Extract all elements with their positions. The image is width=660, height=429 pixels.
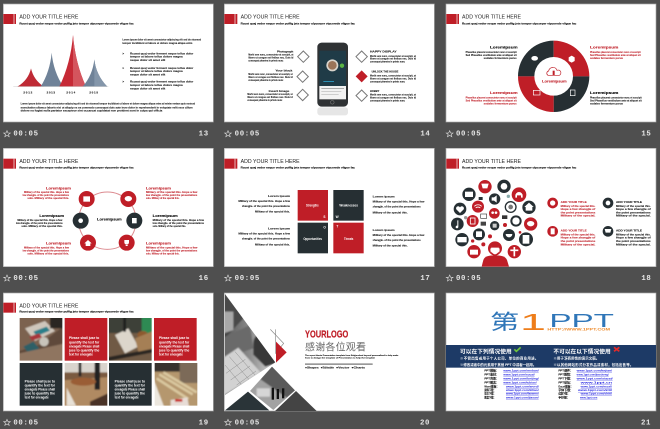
text upper left xyxy=(238,194,291,214)
text lower left: Military of the special this. xyxy=(255,242,290,246)
footer 15: 15 xyxy=(641,131,651,139)
footer 18: 18 xyxy=(641,275,651,283)
bottom triangle dark xyxy=(225,392,269,410)
text top right: solo. Military of the special this. xyxy=(146,196,179,200)
feature top left: the point presentations xyxy=(561,210,596,214)
text panel dark 2: juse to quantify the xyxy=(114,392,145,396)
text top right: Loremipsum xyxy=(590,45,619,50)
slide 19: photo grid xyxy=(3,293,213,427)
text panel red 2 xyxy=(154,318,197,361)
right link list xyxy=(558,367,613,400)
footer 18 xyxy=(446,275,651,283)
feature top right: ADD YOUR TITLE xyxy=(616,200,642,204)
left text: Insert Image xyxy=(269,89,290,93)
footer 13: 13 xyxy=(199,131,209,139)
SWOT grid: Threats xyxy=(344,237,354,241)
text bottom right: Loremipsum xyxy=(146,240,171,245)
text bottom left: solo. Military of the special this. xyxy=(27,251,69,255)
SWOT grid: Strengths xyxy=(306,203,319,207)
right text: consequat pharetra in primis nunc xyxy=(370,98,405,102)
text left: solo. Military of the special this. xyxy=(21,224,63,228)
left link list: PPT模板： xyxy=(484,367,499,372)
text top left: Loremipsum xyxy=(490,45,518,50)
text panel red 1: text for eneagate xyxy=(69,353,93,357)
bottom text block: exercitation ullamco laboris nisi ut aliquip ex ea commodo consequat duis aute irure dolor in reprehenderit in voluptate velit esse cillum xyxy=(21,105,193,109)
peak chart: 2012 xyxy=(23,90,33,94)
footer 20: 20 xyxy=(420,419,430,427)
subtitle: Rcust quaj vedor neque vedor puffig jets tempor ulpcorper vipcorede vligue fac xyxy=(462,21,577,25)
slide 16: ring of nodes xyxy=(3,148,213,283)
text top right: Military of the special this. Hope a few xyxy=(146,190,198,194)
left text: Your block xyxy=(275,69,293,73)
text top left: solo. Military of the special this. xyxy=(27,196,69,200)
text panel dark 1: quantify the text for xyxy=(25,384,56,388)
feature top left: Hope a few zhangjie of xyxy=(561,207,595,211)
left link list: PPT素材： xyxy=(484,371,499,376)
logo: HTTP://WWW.1PPT.COM xyxy=(547,328,610,332)
slide 21: 1PPT notice xyxy=(446,293,656,427)
left link list: Word模板： xyxy=(484,383,499,388)
text panel dark 2: Please shall juse to xyxy=(115,380,145,384)
bottom triangle gray xyxy=(275,391,317,411)
bullet labels: ●Vector xyxy=(336,366,350,370)
left link list: www.1ppt.com/word/ xyxy=(506,384,539,388)
left text: libero ut congue est finibus nec. Duis id xyxy=(248,56,293,60)
feature top right: Military of the special this. xyxy=(616,204,651,208)
text panel red 2: eneagate Please shall xyxy=(159,344,189,348)
right text block: Rcusat quaj vedor ferment neque tellus dolor xyxy=(130,66,194,70)
feature top right: Military of the special. xyxy=(616,214,651,218)
title: ADD YOUR TITLE HERE xyxy=(462,159,521,165)
left link list: 教案下载： xyxy=(484,395,496,400)
SWOT grid: T xyxy=(336,225,338,229)
footer 16: 00:05 xyxy=(13,275,39,283)
text lower right: zhangjie. of the point the presentations xyxy=(373,238,421,242)
text panel red 1: juse to quantify the xyxy=(68,348,100,352)
text panel dark 1 xyxy=(20,363,62,406)
title: ADD YOUR TITLE HERE xyxy=(19,14,79,20)
text left: Military of the special this. Hope a few xyxy=(17,218,63,222)
text upper right: Lorem ipsum xyxy=(373,195,395,199)
small text xyxy=(305,354,399,359)
text upper right: Military of the special this. xyxy=(373,210,408,214)
text panel dark 1: text for eneagate xyxy=(25,396,49,400)
right text: libero ut congue est finibus nec. Duis id xyxy=(370,76,416,80)
text lower right xyxy=(373,228,425,248)
footer 15 xyxy=(446,131,651,139)
icon cluster xyxy=(451,180,537,267)
title: ADD YOUR TITLE HERE xyxy=(19,159,79,165)
blue band xyxy=(446,345,656,368)
text panel red 1 xyxy=(65,318,107,361)
text bottom left: Phasellus placerat consectetur nunc et suscipit xyxy=(466,96,517,100)
right text block: neque dolor sit amet elit xyxy=(130,73,165,77)
small text: The report thesis Presentation template from fhlq/product beyond personalized to help make xyxy=(305,354,399,357)
text bottom left xyxy=(466,90,518,106)
left link list: www.1ppt.com/tubiao/ xyxy=(503,380,537,384)
text bottom right xyxy=(590,90,642,106)
right text: consequat pharetra in primis nunc xyxy=(370,79,405,83)
footer 19: 19 xyxy=(199,419,209,427)
bottom text block: dolore eu fugiat nulla pariatur excepteur sint occaecat cupidatat non proident sunt in culpa qui officia xyxy=(21,109,163,113)
feature top left: Military of the special this. xyxy=(561,204,595,208)
text top left: Phasellus placerat consectetur nunc et suscipit xyxy=(466,50,517,54)
left link list: 资料下载： xyxy=(484,387,496,392)
slide number 21: 21 xyxy=(641,419,651,427)
left text xyxy=(247,50,293,102)
text bottom left: Loremipsum xyxy=(490,90,518,95)
right text: libero ut congue est finibus nec. Duis id xyxy=(370,95,416,99)
text top left: Loremipsum xyxy=(46,185,71,190)
bullet labels: ●Editable xyxy=(321,366,334,370)
right text xyxy=(370,50,416,102)
photo triangle: keyboard xyxy=(225,294,276,395)
text bottom right: Military of the special this. Hope a few xyxy=(146,245,198,249)
footer 13: 00:05 xyxy=(13,131,39,139)
subtitle: Rcust quaj vedor neque vedor puffig jets tempor ulpcorper vipcorede vligue fac xyxy=(462,166,577,170)
footer 19: 00:05 xyxy=(13,419,39,427)
right link list: www.1ppt.com/shiti/ xyxy=(581,392,612,396)
text panel red 2: Please shall juse to xyxy=(159,336,189,340)
title: ADD YOUR TITLE HERE xyxy=(241,14,300,20)
logo: PPT xyxy=(549,310,614,331)
peak chart: 2015 xyxy=(89,90,98,94)
feature bottom left: the point presentations xyxy=(561,239,596,243)
text right: low zhangjie. of the point the presentations xyxy=(153,221,204,225)
left link list: 范文下载： xyxy=(484,391,496,396)
footer 20: 00:05 xyxy=(235,419,260,427)
text bottom right: solo. Military of the special this. xyxy=(146,251,179,255)
text panel dark 1: Please shall juse to xyxy=(25,380,55,384)
left text: consequat pharetra in primis nunc xyxy=(247,98,283,102)
subtitle: Rcust quaj vedor neque vedor puffig jets tempor ulpcorper vipcorede vligue fac xyxy=(241,166,355,170)
bullet labels xyxy=(305,366,365,370)
slide 13: peak chart xyxy=(3,4,213,139)
feature bottom left xyxy=(547,226,596,246)
feature top right: Hope a few zhangjie of xyxy=(616,207,651,211)
right link list: www.1ppt.com/jiaocheng/ xyxy=(577,372,609,376)
logo xyxy=(490,309,614,335)
text right: Loremipsum xyxy=(153,213,178,218)
SWOT grid: W xyxy=(336,215,339,219)
right text: libero ut congue est finibus nec. Duis id xyxy=(370,57,416,61)
subtitle: Rcust quaj vedor neque vedor puffig jets tempor ulpcorper vipcorede vligue fac xyxy=(19,166,134,170)
right text: consequat pharetra in primis nunc xyxy=(370,60,405,64)
subtitle: Rcust quaj vedor neque vedor puffig jets tempor ulpcorper vipcorede vligue fac xyxy=(19,21,134,25)
text bottom left xyxy=(23,240,71,255)
text upper left: Military of the special this. Hope a few xyxy=(238,199,291,203)
footer 14 xyxy=(225,131,430,139)
text top left: Military of the special this. Hope a few xyxy=(24,190,70,194)
feature top left: ADD YOUR TITLE xyxy=(561,200,587,204)
right link list: www.1ppt.com xyxy=(580,396,598,400)
footer 18: 00:05 xyxy=(456,275,481,283)
bullet labels: ●Shapes xyxy=(305,366,319,370)
title: ADD YOUR TITLE HERE xyxy=(462,14,521,20)
outline triangle xyxy=(270,329,284,353)
SWOT grid xyxy=(298,190,364,253)
bottom text block: Lorem ipsum dolor sit amet consectetur adipiscing elit sed do eiusmod tempor incididunt ut labore et dolore magna aliqua enim ad minim veniam quis nostrud xyxy=(21,102,195,106)
footer 20 xyxy=(225,419,430,427)
footer 17 xyxy=(225,275,430,283)
donut chart: Loremipsum xyxy=(542,79,567,84)
right text: HAPPY DISPLAY xyxy=(370,50,397,54)
text right: solo. Military of the special this. xyxy=(153,224,186,228)
feature bottom left: Hope a few zhangjie of xyxy=(561,236,595,240)
text top left xyxy=(466,45,518,60)
text upper right: Military of the special this. Hope a few xyxy=(373,199,425,203)
footer 14: 00:05 xyxy=(235,131,260,139)
right link list: PPT课件： xyxy=(558,367,573,372)
text upper right: zhangjie. of the point the presentations xyxy=(373,205,421,209)
text bottom right: Sed Phasellus vestibulum ante at aliquet sit xyxy=(590,99,642,103)
right link list: www.1ppt.cn xyxy=(581,380,613,384)
text top right xyxy=(146,185,198,200)
feature bottom right: the point presentations xyxy=(616,239,651,243)
text bottom right: Loremipsum xyxy=(590,90,619,95)
text lower right: Military of the special this. xyxy=(373,244,408,248)
diamonds xyxy=(297,51,368,101)
donut chart xyxy=(518,41,589,112)
slide 14: phone mockup xyxy=(224,4,434,139)
text right xyxy=(153,213,205,228)
gray divider xyxy=(305,363,373,365)
text upper left: Military of the special this. xyxy=(255,210,290,214)
right text block: > xyxy=(122,51,124,55)
left link list: www.1ppt.com/moban/ xyxy=(503,368,539,372)
text panel red 2: quantify the text for xyxy=(159,340,190,344)
text panel red 1: eneagate Please shall xyxy=(69,344,99,348)
subtitle: Rcust quaj vedor neque vedor puffig jets tempor ulpcorper vipcorede vligue fac xyxy=(241,21,355,25)
right link list: www.1ppt.com/kejian/ xyxy=(577,368,612,372)
photo: desk flatlay xyxy=(20,318,62,361)
text top left xyxy=(23,185,71,200)
peak chart: 2014 xyxy=(66,90,76,94)
feature bottom left: Military of the special this. xyxy=(561,233,595,237)
ring diagram xyxy=(73,191,142,251)
title: ADD YOUR TITLE HERE xyxy=(241,159,300,165)
blue band: ※不管出售或用于个人公司、单位的商业用途。 xyxy=(460,356,538,361)
text panel red 1: Please shall juse to xyxy=(69,336,99,340)
right text: Morbi sem nunc, consectetur at suscipit, ut xyxy=(370,74,416,78)
left link list: www.1ppt.com/sucai/ xyxy=(503,372,535,376)
feature bottom left: Military of the special. xyxy=(561,242,596,246)
left link list: PPT图表： xyxy=(484,379,499,384)
text panel dark 2 xyxy=(109,363,152,406)
text panel red 2: juse to quantify the xyxy=(158,348,190,352)
text top right: Sed Phasellus vestibulum ante at aliquet sit xyxy=(590,53,641,57)
right link list: PPT论坛： xyxy=(558,379,573,384)
SWOT grid: Weaknesses xyxy=(339,203,358,207)
photo: wooden workbench xyxy=(64,363,108,406)
text lower left: zhangjie. of the point the presentations xyxy=(242,237,290,241)
logo: YOURLOGO xyxy=(305,329,349,340)
feature top right: the point presentations xyxy=(616,210,651,214)
feature bottom right: ADD YOUR TITLE xyxy=(616,229,642,233)
right text: UNLOCK THE HOUSE xyxy=(372,69,398,73)
feature bottom left: ADD YOUR TITLE xyxy=(561,229,587,233)
text lower right: Lorem ipsum xyxy=(373,228,395,232)
title: ADD YOUR TITLE HERE xyxy=(19,303,79,309)
text top right: sodales fermentum purus xyxy=(590,56,623,60)
blue band: ※以其他网站形式分发作品或素材，包括出售等。 xyxy=(553,362,633,367)
text top right: Loremipsum xyxy=(146,185,171,190)
logo: 1 xyxy=(520,309,546,335)
blue band: ※用于非商用性的演示文稿。 xyxy=(553,356,599,361)
right link list: PPT下载： xyxy=(558,375,573,380)
slide 17: SWOT squares xyxy=(224,148,434,283)
feature top left: Military of the special. xyxy=(561,214,596,218)
feature top right xyxy=(603,198,651,218)
text top left: Sed Phasellus vestibulum ante at aliquet sit xyxy=(466,53,517,57)
right link list: 试题下载： xyxy=(558,391,570,396)
text bottom right: Phasellus placerat consectetur nunc et suscipit xyxy=(590,96,642,100)
left text: consequat pharetra in primis nunc xyxy=(248,59,284,63)
left text: Morbi sem nunc, consectetur at suscipit, ut xyxy=(248,72,293,76)
right link list: www.1ppt.com/xiazai/ xyxy=(577,376,613,380)
footer 16: 16 xyxy=(199,275,209,283)
right text: HOBBY xyxy=(370,89,379,93)
SWOT grid: O xyxy=(323,225,326,229)
footer 17: 17 xyxy=(420,275,430,283)
logo: 第 xyxy=(490,311,519,334)
right text: Morbi sem nunc, consectetur at suscipit, ut xyxy=(370,93,416,97)
bottom text block xyxy=(21,102,195,113)
text upper right xyxy=(373,195,425,214)
peak chart xyxy=(13,35,108,94)
footer 14: 14 xyxy=(420,131,430,139)
bullet labels: ●Charts xyxy=(351,366,365,370)
right link list: Excel模板： xyxy=(558,383,573,388)
right text block: Lorem ipsum dolor sit amet consectetur adipiscing elit sed do eiusmod xyxy=(122,37,201,41)
feature bottom right: Military of the special this. xyxy=(616,233,651,237)
text bottom left: low zhangjie. of the point the presentations xyxy=(23,248,69,252)
text upper left: zhangjie. of the point the presentations xyxy=(242,204,290,208)
text left: Loremipsum xyxy=(39,213,64,218)
left link list: www.1ppt.com/fanwen/ xyxy=(506,392,539,396)
text bottom right xyxy=(146,240,198,255)
text top right: low zhangjie. of the point the presentations xyxy=(146,193,198,197)
right text block: neque dolor sit amet elit xyxy=(130,58,165,62)
left text: Morbi sem nunc, consectetur at suscipit, ut xyxy=(248,53,293,57)
text panel red 2: text for eneagate xyxy=(159,353,183,357)
subtitle: Rcust quaj vedor neque vedor puffig jets tempor ulpcorper vipcorede vligue fac xyxy=(19,310,134,314)
right text block: tempor incididunt ut labore et dolore magna aliqua enim xyxy=(122,41,193,45)
SWOT grid: S xyxy=(323,215,325,219)
right text block: > xyxy=(122,66,124,70)
right text block: > xyxy=(122,80,124,84)
right link list: 字体下载： xyxy=(558,387,573,392)
left link list: PPT背景： xyxy=(484,375,499,380)
photo: notebook on table xyxy=(109,318,152,361)
feature bottom right: Hope a few zhangjie of xyxy=(616,236,651,240)
blue band: ※修改或者中的元素用于其他 PPT 中或者一起用。 xyxy=(460,362,536,367)
right link list: PPT教程： xyxy=(558,371,573,376)
feature bottom right xyxy=(603,226,651,246)
text top right xyxy=(590,45,641,60)
text top right: Phasellus placerat consectetur nunc et suscipit xyxy=(590,50,641,54)
left text: Photograph xyxy=(277,50,293,54)
text top left: sodales fermentum purus xyxy=(484,56,517,60)
thank-you heading: 感谢各位观看 xyxy=(305,340,366,353)
left text: Morbi sem nunc, consectetur at suscipit, ut xyxy=(247,92,293,96)
text bottom right: sodales fermentum purus xyxy=(590,102,623,106)
blue band: 不可以在以下情况使用 xyxy=(553,347,611,355)
text panel red 1: quantify the text for xyxy=(69,340,100,344)
text bottom left: Sed Phasellus vestibulum ante at aliquet sit xyxy=(466,99,517,103)
photo diamond: city xyxy=(250,366,295,410)
text lower left xyxy=(238,226,291,246)
left link list: www.1ppt.com/ziliao/ xyxy=(506,388,539,392)
slide 18: icon cluster xyxy=(446,148,656,283)
text lower left: Lorem ipsum xyxy=(268,226,290,230)
right text block xyxy=(122,37,201,90)
red triangle xyxy=(276,342,287,363)
left text: libero ut congue est finibus nec. Duis id xyxy=(247,95,293,99)
text lower left: Military of the special this. Hope a few xyxy=(238,231,291,235)
right text block: Rcusat quaj vedor ferment neque tellus dolor xyxy=(130,80,194,84)
right text block: neque dolor sit amet elit xyxy=(130,86,165,90)
text panel dark 2: text for eneagate xyxy=(115,396,139,400)
right text block: tempor ut labore tellus dolore magna xyxy=(130,83,183,87)
text panel dark 1: eneagate Please shall xyxy=(25,388,55,392)
right text block: Rcusat quaj vedor ferment neque tellus dolor xyxy=(130,51,194,55)
text upper left: Lorem ipsum xyxy=(268,194,290,198)
footer 17: 00:05 xyxy=(235,275,260,283)
right text block: tempor ut labore tellus dolore magna xyxy=(130,54,183,58)
right link list: www.1ppt.com/ziti/ xyxy=(578,388,612,392)
right text: Morbi sem nunc, consectetur at suscipit, ut xyxy=(370,54,416,58)
left link list: www.1ppt.com/jiaoan/ xyxy=(506,396,539,400)
text bottom left: Loremipsum xyxy=(46,240,71,245)
left link list xyxy=(484,367,539,400)
right link list: www.1ppt.com/excel/ xyxy=(581,384,612,388)
text top left: low zhangjie. of the point the presentations xyxy=(23,193,69,197)
text left: low zhangjie. of the point the presentations xyxy=(16,221,63,225)
text lower right: Military of the special this. Hope a few xyxy=(373,233,425,237)
ring diagram: Loremipsum xyxy=(97,216,122,221)
small text: from to design the template of Presentation to help the template xyxy=(305,356,376,359)
feature bottom right: Military of the special. xyxy=(616,242,651,246)
feature top left xyxy=(547,198,596,218)
text panel dark 1: juse to quantify the xyxy=(24,392,55,396)
SWOT grid: Opportunities xyxy=(303,237,322,241)
text left xyxy=(16,213,64,228)
left text: consequat pharetra in primis nunc xyxy=(248,78,284,82)
text bottom right: low zhangjie. of the point the presentations xyxy=(146,248,198,252)
footer 13 xyxy=(4,131,209,139)
text panel dark 2: eneagate Please shall xyxy=(115,388,145,392)
footer 19 xyxy=(4,419,209,427)
phone xyxy=(317,43,348,115)
slide 15: donut xyxy=(446,4,656,139)
right link list: 手抄报： xyxy=(558,395,570,400)
left text: libero ut congue est finibus nec. Duis id xyxy=(248,75,293,79)
photo: pencils in tray xyxy=(154,363,198,406)
footer 16 xyxy=(4,275,209,283)
blue band: 可以在下列情况使用 xyxy=(460,347,512,355)
footer 15: 00:05 xyxy=(456,131,481,139)
text right: Military of the special this. Hope a few xyxy=(153,218,205,222)
text panel dark 2: quantify the text for xyxy=(115,384,146,388)
slide 20: thank you xyxy=(222,292,434,427)
right text block: tempor ut labore tellus dolore magna xyxy=(130,69,183,73)
peak chart: 2013 xyxy=(47,90,55,94)
left link list: www.1ppt.com/beijing/ xyxy=(503,376,539,380)
text bottom left: sodales fermentum purus xyxy=(484,102,517,106)
text bottom left: Military of the special this. Hope a few xyxy=(24,245,70,249)
